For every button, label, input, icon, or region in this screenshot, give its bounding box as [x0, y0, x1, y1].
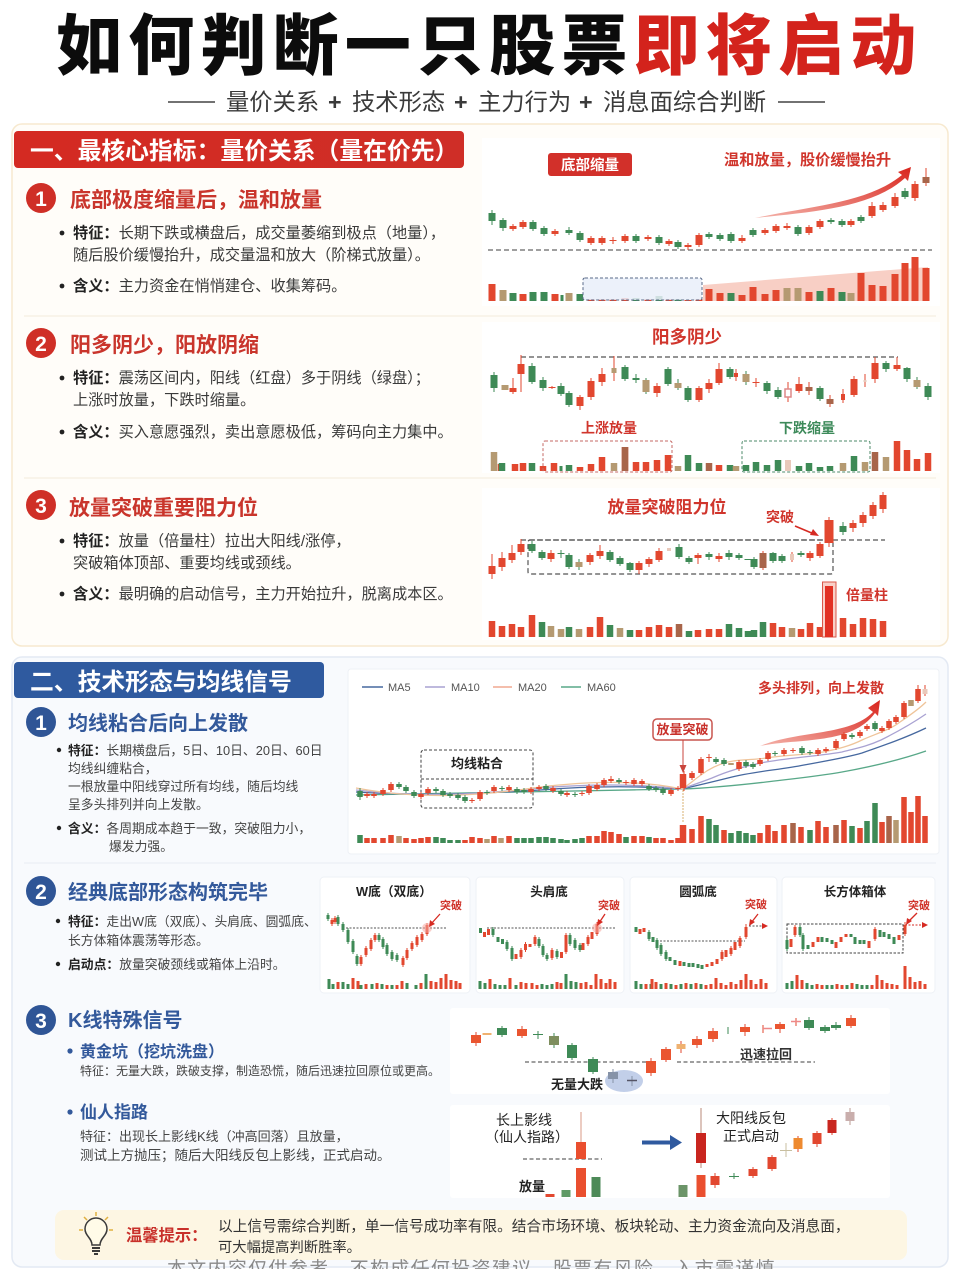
chart 4: moving averages diverge upward	[348, 669, 939, 854]
chart: immortal pointing the way: 正式启动	[723, 1128, 779, 1144]
item 1: MA convergence text: 爆发力强。	[109, 839, 173, 854]
callout: warm tip: 温馨提示：	[126, 1227, 207, 1245]
item 1: bottom shrink volume text: 随后股价缓慢抬升，成交量温和放大（阶梯式放量）。	[73, 246, 430, 264]
mini chart: rectangle box: 突破	[908, 898, 930, 912]
chart 4: moving averages diverge upward: 均线粘合	[451, 756, 503, 771]
moving average legend	[362, 682, 616, 694]
item 3: volume breakout text: 3	[35, 495, 47, 518]
item 1: bottom shrink volume text: 含义：主力资金在悄悄建仓、收集筹码。	[73, 277, 346, 295]
item 1: MA convergence text: 呈多头排列并向上发散。	[68, 797, 209, 812]
item 3: special candlestick signals text: 仙人指路	[80, 1103, 148, 1122]
chart 1: bottom contraction then gentle volume: 底部缩量	[561, 156, 619, 174]
item 2: more red than green text: 特征：震荡区间内，阳线（红盘）多于阴线（绿盘）；	[73, 369, 430, 387]
panel: section two	[12, 657, 948, 1267]
item 3: volume breakout text: 含义：最明确的启动信号，主力开始拉升，脱离成本区。	[73, 585, 453, 603]
chart 1: bottom contraction then gentle volume	[482, 138, 940, 306]
item 2: bottom patterns text: 启动点：放量突破颈线或箱体上沿时。	[68, 957, 286, 972]
item 1: bottom shrink volume text: 1	[35, 188, 47, 211]
subtitle: 量价关系	[226, 89, 319, 115]
item 1: MA convergence text: 特征：长期横盘后，5日、10日、20日、60日	[68, 743, 323, 758]
section two heading	[14, 662, 324, 698]
mini chart: rounded bottom: 圆弧底	[679, 884, 717, 899]
subtitle	[168, 89, 825, 115]
chart 3: breakout through resistance: 放量突破阻力位	[608, 497, 726, 517]
mini chart: head and shoulders bottom: 突破	[598, 898, 620, 912]
item 3: volume breakout text: 特征：放量（倍量柱）拉出大阳线/涨停，	[73, 532, 351, 550]
mini chart: W bottom: W底（双底）	[356, 884, 432, 899]
chart 4: moving averages diverge upward: 多头排列，向上发散	[758, 680, 884, 696]
chart 1: bottom contraction then gentle volume: 温和放量，股价缓慢抬升	[724, 151, 891, 169]
item 2: bottom patterns text	[26, 876, 317, 972]
item 3: special candlestick signals text: 3	[35, 1010, 47, 1033]
item 2: more red than green text	[26, 328, 453, 441]
item 3: special candlestick signals text	[26, 1005, 440, 1164]
item 1: bottom shrink volume text	[26, 183, 445, 295]
section one heading: 一、最核心指标：量价关系（量在价先）	[30, 138, 458, 165]
subtitle: 主力行为	[478, 89, 571, 115]
chart: immortal pointing the way: 长上影线	[496, 1112, 552, 1128]
subtitle: +	[454, 89, 468, 115]
item 2: more red than green text: 上涨时放量，下跌时缩量。	[73, 392, 255, 409]
chart 2: more up candles than down	[482, 322, 940, 473]
item 1: MA convergence text: 含义：各周期成本趋于一致，突破阻力小，	[68, 821, 311, 836]
item 2: more red than green text: 阳多阴少，阳放阴缩	[70, 333, 259, 357]
chart 3: breakout through resistance	[482, 488, 940, 640]
callout: warm tip: 以上信号需综合判断，单一信号成功率有限。结合市场环境、板块轮动、主力资金流向及消息面，	[218, 1217, 850, 1235]
item 2: more red than green text: 含义：买入意愿强烈，卖出意愿极低，筹码向主力集中。	[73, 423, 453, 441]
section one heading	[14, 131, 464, 168]
moving average legend: MA60	[587, 682, 616, 694]
volume bars	[367, 796, 925, 843]
chart 4: moving averages diverge upward: 放量突破	[656, 722, 709, 737]
item 3: volume breakout text: 突破箱体顶部、重要均线或颈线。	[73, 555, 301, 572]
moving average legend: MA5	[388, 682, 411, 694]
chart: immortal pointing the way: （仙人指路）	[485, 1129, 569, 1145]
icon: blue arrow	[642, 1135, 682, 1150]
moving average lines	[356, 702, 926, 795]
chart: golden pit: 迅速拉回	[740, 1047, 792, 1062]
item 2: bottom patterns text: 经典底部形态构筑完毕	[68, 880, 268, 904]
candles	[367, 685, 925, 803]
item 2: bottom patterns text: 2	[35, 881, 47, 904]
item 1: MA convergence text: 均线粘合后向上发散	[68, 712, 248, 735]
subtitle: 技术形态	[352, 89, 445, 115]
chart 2: more up candles than down: 下跌缩量	[779, 420, 835, 436]
item 2: bottom patterns text: 长方体箱体震荡等形态。	[68, 933, 209, 948]
item 3: special candlestick signals text: 黄金坑（挖坑洗盘）	[80, 1042, 224, 1061]
subtitle: 消息面综合判断	[603, 89, 766, 115]
mini chart: W bottom	[320, 877, 470, 993]
item 1: bottom shrink volume text: 底部极度缩量后，温和放量	[70, 188, 322, 212]
subtitle: +	[579, 89, 593, 115]
chart: golden pit	[450, 1008, 890, 1094]
mini chart: W bottom: 突破	[440, 898, 462, 912]
mini chart: rounded bottom: 突破	[745, 897, 767, 911]
chart: golden pit: 无量大跌	[551, 1077, 603, 1092]
callout: warm tip: 可大幅提高判断胜率。	[218, 1239, 361, 1256]
mini chart: rounded bottom	[630, 877, 777, 993]
title: 如何判断一只股票即将启动	[56, 9, 922, 83]
callout: warm tip	[55, 1210, 907, 1260]
item 1: bottom shrink volume text: 特征：长期下跌或横盘后，成交量萎缩到极点（地量），	[73, 224, 445, 242]
item 1: MA convergence text: 1	[35, 712, 47, 735]
item 3: special candlestick signals text: 特征：无量大跌，跌破支撑，制造恐慌，随后迅速拉回原位或更高。	[80, 1063, 440, 1078]
panel: section one	[12, 124, 948, 646]
item 2: bottom patterns text: 特征：走出W底（双底）、头肩底、圆弧底、	[68, 914, 317, 929]
item 2: more red than green text: 2	[35, 333, 47, 356]
item 1: MA convergence text	[26, 707, 323, 854]
icon: light bulb	[79, 1212, 113, 1254]
chart 2: more up candles than down: 上涨放量	[581, 420, 637, 436]
mini chart: head and shoulders bottom	[476, 877, 624, 993]
chart 3: breakout through resistance: 倍量柱	[846, 587, 888, 603]
moving average legend: MA20	[518, 682, 547, 694]
mini chart: rectangle box	[782, 877, 935, 993]
item 1: MA convergence text: 一根放量中阳线穿过所有均线，随后均线	[68, 779, 299, 794]
item 1: MA convergence text: 均线纠缠粘合，	[68, 761, 158, 776]
subtitle: +	[328, 89, 342, 115]
chart 2: more up candles than down: 阳多阴少	[652, 327, 722, 347]
chart: immortal pointing the way	[450, 1105, 890, 1198]
item 3: volume breakout text: 放量突破重要阻力位	[69, 496, 258, 520]
chart 3: breakout through resistance: 突破	[766, 509, 794, 525]
item 3: special candlestick signals text: 测试上方抛压；随后大阳线反包上影线，正式启动。	[80, 1148, 390, 1164]
mini chart: head and shoulders bottom: 头肩底	[530, 884, 568, 899]
chart: immortal pointing the way: 大阳线反包	[716, 1110, 786, 1126]
section two heading: 二、技术形态与均线信号	[30, 669, 292, 696]
item 3: special candlestick signals text: K线特殊信号	[68, 1009, 182, 1032]
mini chart: rectangle box: 长方体箱体	[824, 884, 887, 899]
item 3: special candlestick signals text: 特征：出现长上影线K线（冲高回落）且放量，	[80, 1129, 349, 1144]
moving average legend: MA10	[451, 682, 480, 694]
chart: immortal pointing the way: 放量	[519, 1179, 545, 1194]
item 3: volume breakout text	[26, 490, 453, 603]
